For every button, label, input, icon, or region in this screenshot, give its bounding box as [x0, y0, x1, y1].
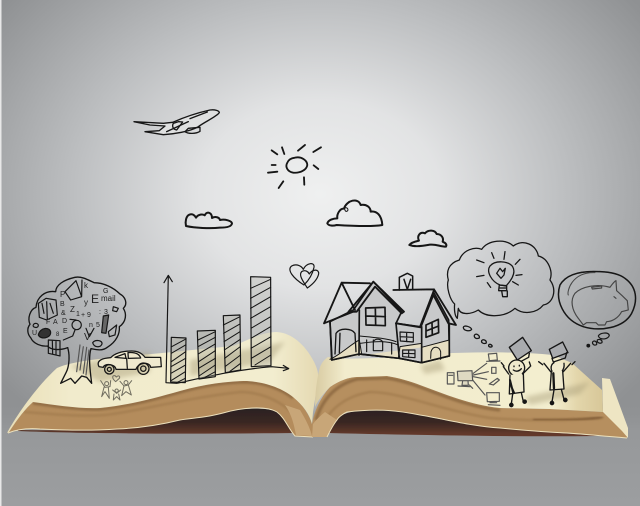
tree letters: 3 — [104, 309, 108, 316]
tree letters: mail — [101, 294, 116, 303]
sketch: house — [324, 273, 456, 363]
book shadow — [18, 409, 600, 436]
thought bubble: light bulb — [447, 241, 554, 347]
left fore-edge — [9, 381, 313, 437]
tree letters: 1 — [76, 311, 80, 318]
sketch: children with graduation hats — [501, 337, 575, 407]
tree letters: B — [60, 301, 65, 308]
bubble trail — [593, 333, 609, 345]
tree letters: E — [63, 328, 68, 335]
tree letters: 5 — [96, 322, 100, 329]
right fore-edge — [312, 376, 627, 438]
right back sheet — [602, 378, 628, 438]
bar 1 — [171, 337, 186, 383]
left page surface — [7, 332, 318, 433]
right child — [539, 342, 575, 405]
bulb — [477, 252, 522, 297]
bar 2 — [197, 330, 215, 379]
tree letters: A — [53, 319, 58, 326]
sketch: hearts — [290, 264, 319, 288]
bubble trail — [463, 326, 492, 347]
chimney — [399, 273, 413, 290]
sketch: car — [98, 351, 161, 374]
book — [7, 332, 628, 438]
sketch: clouds — [186, 200, 446, 247]
house roof — [324, 282, 404, 323]
tree letters: k — [84, 281, 89, 290]
bar 4 — [251, 277, 271, 367]
tree letters: E — [91, 292, 99, 306]
house windows — [366, 307, 385, 326]
left page edge highlight — [8, 408, 313, 437]
tree letters: y — [84, 298, 88, 307]
tree letters: F — [46, 319, 50, 326]
tree letters: 8 — [56, 332, 60, 338]
page shadows — [70, 342, 590, 405]
sketch: sun — [268, 145, 321, 188]
chart: hand-drawn bar chart — [164, 275, 289, 383]
tree letters: G — [103, 288, 108, 295]
left child — [501, 337, 531, 407]
tree letters: U — [32, 330, 37, 337]
house walls — [330, 310, 449, 363]
tree letters: n — [89, 322, 93, 329]
tree letters: : — [99, 309, 101, 316]
sketch: people on left page — [101, 376, 132, 400]
chart axes — [164, 275, 289, 383]
tree crown — [28, 277, 126, 350]
tree letters: D — [62, 318, 67, 325]
network desktop — [447, 373, 454, 384]
thought bubble: piggy bank — [559, 271, 636, 347]
bar 3 — [223, 315, 241, 373]
tree letters — [32, 281, 116, 343]
sketch: tree — [28, 277, 126, 383]
tree book — [33, 280, 118, 356]
right page surface — [315, 352, 603, 412]
tree letters: Z — [70, 305, 75, 314]
tree letters: & — [61, 310, 66, 317]
sketch: airplane — [134, 110, 219, 135]
tree letters: + 9 — [81, 312, 91, 319]
tree letters: P — [60, 290, 65, 299]
sketch: computer network — [447, 353, 500, 405]
tree letters: V — [84, 332, 91, 343]
